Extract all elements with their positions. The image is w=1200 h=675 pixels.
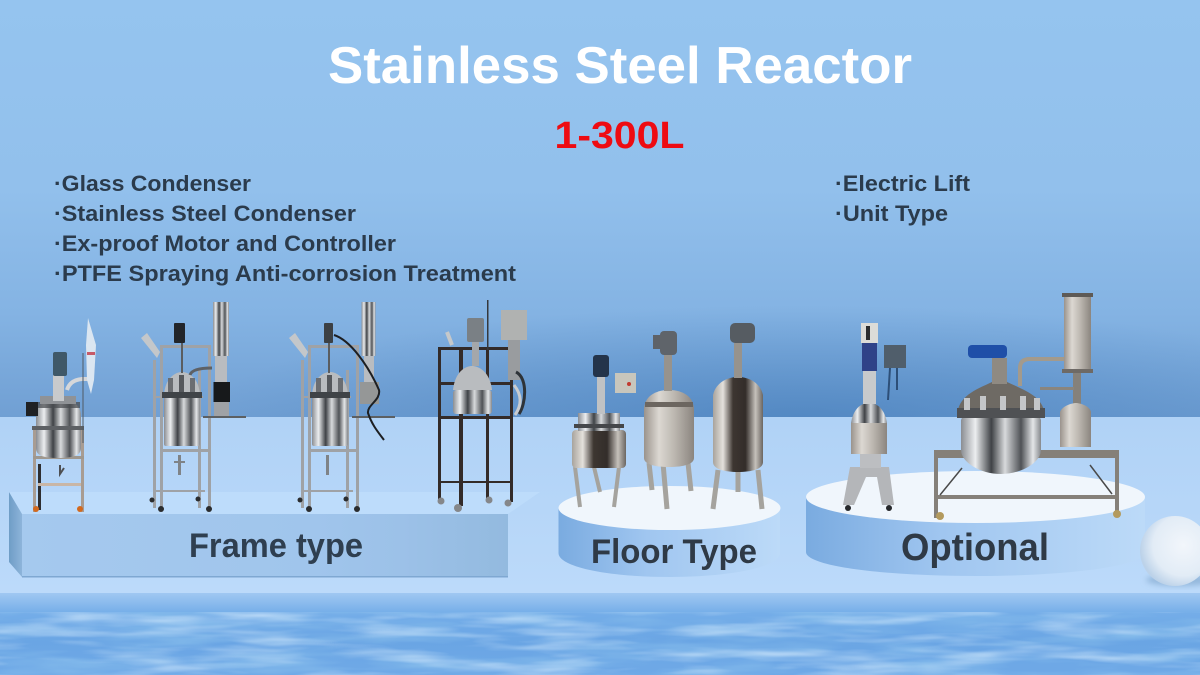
reactor 2: frame with stainless condenser and control box bbox=[141, 302, 246, 512]
reactor 4: black powder-coated frame bbox=[438, 300, 527, 512]
label: frame type: Frame type bbox=[189, 527, 363, 565]
feature list: frame and floor options: ·PTFE Spraying Anti-corrosion Treatment bbox=[54, 261, 517, 286]
label: floor type: Floor Type bbox=[591, 533, 757, 571]
subtitle: capacity range: 1-300L bbox=[554, 115, 684, 157]
reactor 8: optional electric lift type bbox=[843, 323, 906, 511]
reactor 9: optional unit type with column bbox=[934, 293, 1121, 520]
feature list: frame and floor options: ·Stainless Steel Condenser bbox=[54, 201, 356, 226]
reactor 1: compact frame with glass condenser bbox=[26, 318, 96, 512]
platform: frame type bbox=[9, 492, 540, 578]
title: Stainless Steel Reactor bbox=[328, 37, 912, 95]
feature list: optional items: ·Electric Lift bbox=[835, 171, 971, 196]
reactor 3: frame with stainless condenser and ex-proof box bbox=[289, 302, 395, 512]
background: floor bbox=[0, 417, 1200, 594]
label: optional: Optional bbox=[901, 527, 1049, 569]
platform: floor type bbox=[558, 486, 780, 577]
feature list: frame and floor options bbox=[54, 171, 517, 286]
reactor 7: floor type tall tank bbox=[713, 323, 763, 509]
feature list: frame and floor options: ·Glass Condenser bbox=[54, 171, 251, 196]
background: sky wall bbox=[0, 0, 1200, 418]
feature list: optional items: ·Unit Type bbox=[835, 201, 948, 226]
background: water bbox=[0, 593, 1200, 675]
platform: optional bbox=[806, 471, 1145, 576]
feature list: optional items bbox=[835, 171, 971, 226]
reactor 6: floor type with rounded tank bbox=[644, 331, 694, 509]
sphere decoration bbox=[1140, 516, 1200, 586]
feature list: frame and floor options: ·Ex-proof Motor and Controller bbox=[54, 231, 396, 256]
reactor 5: floor type with control box bbox=[572, 355, 636, 507]
